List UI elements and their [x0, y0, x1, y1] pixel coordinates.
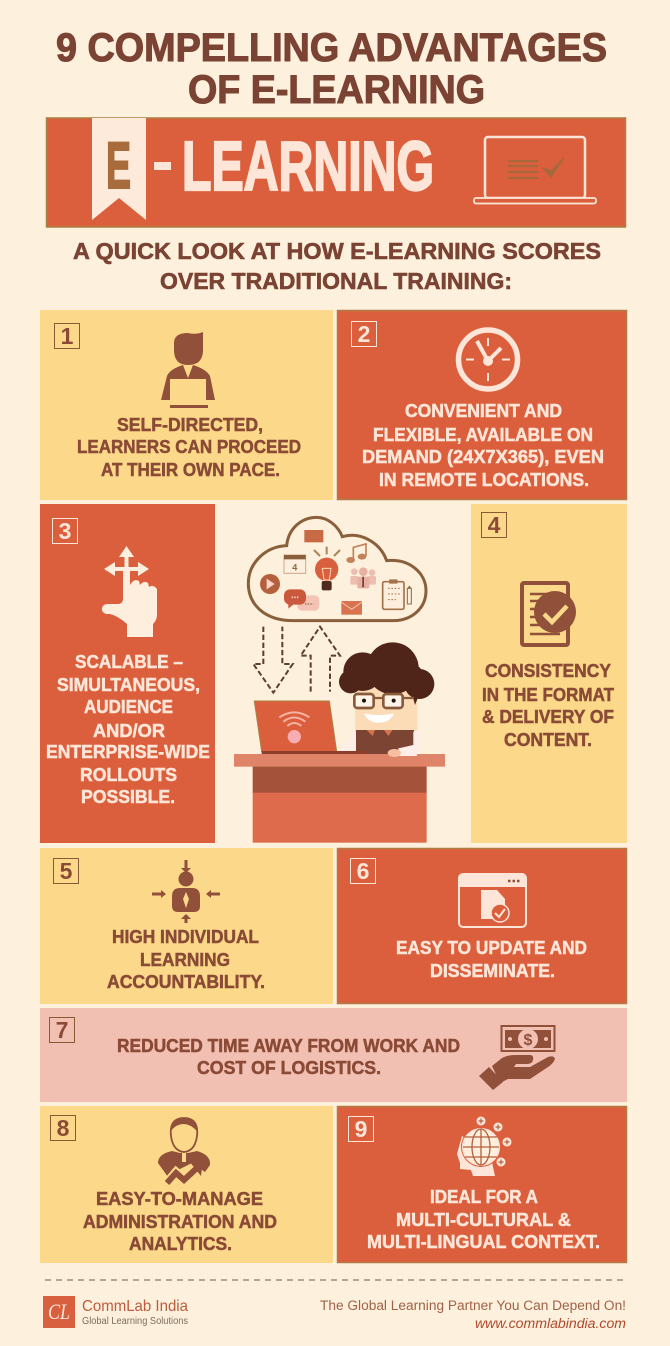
- text: ACCOUNTABILITY.: [107, 972, 265, 992]
- subheading: A QUICK LOOK AT HOW E-LEARNING SCORES: [73, 238, 601, 264]
- icon: head with globe: [457, 1116, 512, 1176]
- text: CONVENIENT AND: [405, 401, 562, 421]
- ribbon with letter E: [92, 118, 146, 220]
- icon: manager with rising arrow: [158, 1118, 210, 1184]
- desk: [234, 754, 445, 843]
- number 6: 6: [357, 858, 369, 884]
- title: 9 COMPELLING ADVANTAGES: [56, 26, 607, 70]
- text: MULTI-LINGUAL CONTEXT.: [367, 1232, 600, 1252]
- footer: logo: [43, 1296, 188, 1328]
- text: LEARNING: [140, 950, 230, 970]
- subheading: [73, 238, 601, 294]
- footer: logo: CL: [48, 1299, 70, 1324]
- ribbon with letter E: E: [106, 128, 131, 202]
- footer: logo: CommLab India: [82, 1298, 188, 1315]
- text: ANALYTICS.: [129, 1234, 232, 1254]
- text: [396, 938, 587, 981]
- text: SELF-DIRECTED,: [117, 415, 263, 435]
- panel 3: scalable: [40, 504, 215, 843]
- cloud with learning content: [248, 517, 426, 621]
- text: CONTENT.: [504, 730, 592, 750]
- number 2: 2: [358, 321, 370, 347]
- icon: hand holding money: $: [524, 1032, 533, 1049]
- text: & DELIVERY OF: [482, 707, 614, 727]
- panel 8: administration: [40, 1106, 333, 1263]
- panel 2: convenient and flexible: [338, 310, 626, 500]
- arrow: download: [253, 627, 293, 693]
- number 9: [348, 1116, 374, 1142]
- number 3: 3: [59, 518, 71, 544]
- banner: e-learning: [46, 118, 626, 227]
- icon: browser window with document: [459, 874, 526, 927]
- banner word: [154, 127, 434, 205]
- subheading: OVER TRADITIONAL TRAINING:: [160, 268, 512, 294]
- number 1: 1: [61, 323, 74, 349]
- cloud with learning content: 4: [292, 563, 298, 573]
- text: SIMULTANEOUS,: [57, 675, 200, 695]
- text: EASY-TO-MANAGE: [96, 1189, 263, 1209]
- text: [83, 1189, 277, 1254]
- text: ENTERPRISE-WIDE: [46, 742, 210, 762]
- text: AND/OR: [93, 721, 165, 741]
- icon: document with check: [522, 583, 576, 645]
- text: COST OF LOGISTICS.: [197, 1058, 381, 1078]
- text: REDUCED TIME AWAY FROM WORK AND: [117, 1036, 460, 1056]
- text: IN REMOTE LOCATIONS.: [379, 470, 589, 490]
- icon: person with arrows: [152, 860, 220, 923]
- panel 5: accountability: [40, 848, 333, 1004]
- text: EASY TO UPDATE AND: [396, 938, 587, 958]
- text: [46, 652, 210, 807]
- text: ADMINISTRATION AND: [83, 1212, 277, 1232]
- text: [107, 927, 265, 992]
- text: ROLLOUTS: [80, 765, 177, 785]
- icon: laptop with checklist: [474, 137, 596, 204]
- banner word: LEARNING: [182, 127, 434, 205]
- panel 1: self-directed: [40, 310, 333, 500]
- footer: tagline and website: www.commlabindia.com: [475, 1316, 626, 1331]
- text: AT THEIR OWN PACE.: [101, 460, 280, 480]
- text: FLEXIBLE, AVAILABLE ON: [373, 425, 593, 445]
- icon: hand with arrows: [102, 546, 157, 637]
- text: [362, 401, 604, 490]
- icon: clock: [458, 330, 518, 389]
- arrow: upload: [301, 627, 340, 692]
- text: CONSISTENCY: [485, 661, 611, 681]
- footer: tagline and website: [320, 1298, 626, 1331]
- text: HIGH INDIVIDUAL: [112, 927, 259, 947]
- panel 9: multi-cultural: [338, 1106, 626, 1262]
- number 7: 7: [56, 1017, 68, 1043]
- text: DISSEMINATE.: [430, 961, 555, 981]
- number 4: [482, 512, 506, 538]
- central illustration: learner and cloud: [234, 517, 445, 843]
- text: IN THE FORMAT: [482, 685, 614, 705]
- number 5: 5: [60, 858, 73, 884]
- laptop with wifi symbol: [254, 701, 368, 754]
- number 8: [50, 1115, 76, 1141]
- text: SCALABLE –: [75, 652, 183, 672]
- number 5: [54, 858, 78, 884]
- icon: learner at laptop: [161, 332, 215, 408]
- panel 4: consistency: [471, 504, 627, 843]
- text: [77, 415, 301, 480]
- number 7: [50, 1017, 74, 1043]
- icon: hand holding money: [479, 1026, 555, 1090]
- title: [56, 26, 607, 112]
- panel 7: reduced time and cost: [40, 1008, 627, 1102]
- footer: tagline and website: The Global Learning Partner You Can Depend On!: [320, 1298, 626, 1313]
- number 9: 9: [355, 1116, 367, 1142]
- text: IDEAL FOR A: [430, 1187, 538, 1207]
- text: MULTI-CULTURAL &: [396, 1210, 571, 1230]
- text: AUDIENCE: [84, 697, 173, 717]
- text: POSSIBLE.: [81, 787, 175, 807]
- panel 6: easy to update: [338, 848, 626, 1004]
- text: [482, 661, 614, 750]
- number 2: [352, 321, 376, 347]
- footer: logo: Global Learning Solutions: [82, 1316, 188, 1327]
- text: [367, 1187, 600, 1252]
- title: OF E-LEARNING: [188, 68, 485, 112]
- number 3: [52, 518, 78, 544]
- number 8: 8: [57, 1115, 70, 1141]
- number 4: 4: [488, 512, 501, 538]
- text: [117, 1036, 460, 1078]
- text: LEARNERS CAN PROCEED: [77, 437, 301, 457]
- text: DEMAND (24X7X365), EVEN: [362, 447, 604, 467]
- number 1: [54, 323, 80, 349]
- number 6: [350, 858, 376, 884]
- learner character: [338, 642, 434, 757]
